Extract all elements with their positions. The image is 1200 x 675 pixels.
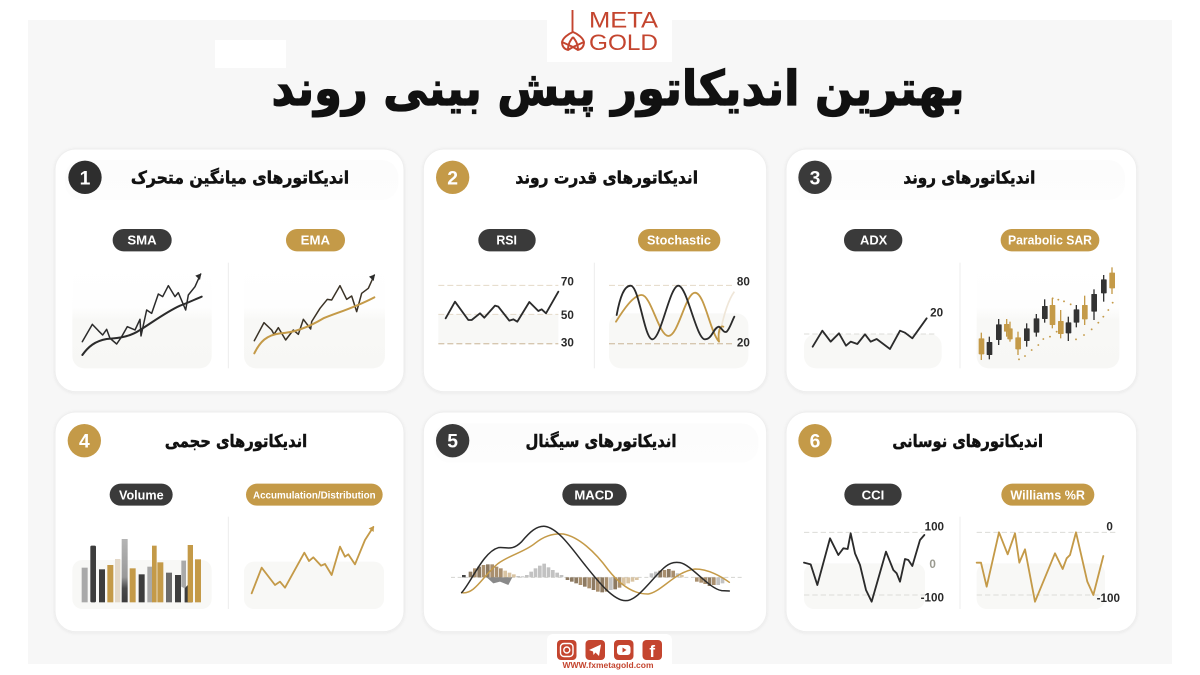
Stochastic pill <box>638 229 720 251</box>
logo wordmark <box>589 8 658 55</box>
number badge 5: 5 <box>447 432 458 453</box>
panel 2: trend strength indicators <box>423 149 767 392</box>
MACD histogram <box>462 564 724 592</box>
main title: بهترین اندیکاتور پیش بینی روند <box>272 61 964 117</box>
icon: facebook: f <box>649 642 655 661</box>
panel 3: trend indicators <box>786 149 1137 392</box>
Williams %R pill: Williams %R <box>1010 488 1085 502</box>
panel 5: signal indicators <box>423 412 767 632</box>
panel heading: اندیکاتورهای نوسانی <box>892 432 1043 452</box>
Volume bar chart <box>72 539 212 609</box>
Williams %R chart: 0 <box>1106 521 1113 534</box>
RSI chart: 70 <box>561 276 574 289</box>
logo wordmark: GOLD <box>589 30 658 55</box>
EMA pill: EMA <box>301 234 330 248</box>
Parabolic SAR pill: Parabolic SAR <box>1008 234 1092 248</box>
RSI pill: RSI <box>496 234 517 248</box>
CCI chart: 100 <box>925 521 944 534</box>
Stochastic chart: 80 <box>737 276 750 289</box>
number badge 4 <box>68 424 101 457</box>
ADX pill: ADX <box>860 234 888 248</box>
Stochastic chart <box>609 276 750 368</box>
RSI pill <box>478 229 536 251</box>
website address: WWW.fxmetagold.com <box>562 661 654 670</box>
EMA chart <box>244 263 385 368</box>
CCI chart <box>804 521 944 609</box>
MACD pill <box>562 484 627 506</box>
icon: instagram <box>557 640 576 660</box>
MACD line <box>462 526 729 601</box>
SMA pill: SMA <box>127 234 157 248</box>
small white patch <box>215 40 286 68</box>
panel heading: اندیکاتورهای میانگین متحرک <box>131 168 349 189</box>
MACD chart <box>451 526 742 601</box>
number badge 3 <box>798 161 832 194</box>
panel 4: volume indicators <box>55 412 404 632</box>
Volume pill <box>110 484 173 506</box>
RSI chart: 50 <box>561 309 574 322</box>
header band <box>797 160 1125 200</box>
Parabolic SAR pill <box>1001 229 1099 251</box>
Stochastic chart: 20 <box>737 337 750 350</box>
SMA pill <box>113 229 172 251</box>
number badge 5 <box>436 424 469 457</box>
RSI chart <box>438 276 574 350</box>
panel 1: moving average indicators <box>55 149 404 392</box>
panel heading: اندیکاتورهای روند <box>903 169 1035 189</box>
number badge 2: 2 <box>447 168 458 189</box>
logo: Meta Gold <box>547 0 672 62</box>
icon: youtube <box>614 640 634 660</box>
Stochastic pill: Stochastic <box>647 234 711 248</box>
panel heading: اندیکاتورهای قدرت روند <box>515 169 698 189</box>
header band <box>65 160 398 200</box>
MACD pill: MACD <box>574 488 614 502</box>
number badge 2 <box>436 161 469 194</box>
CCI chart: 0 <box>929 558 936 571</box>
number badge 1: 1 <box>80 168 91 189</box>
number badge 4: 4 <box>79 432 90 453</box>
EMA pill <box>286 229 345 251</box>
number badge 3: 3 <box>810 168 821 189</box>
Parabolic SAR candlestick chart <box>977 263 1119 368</box>
signal line <box>462 534 729 594</box>
Williams %R chart <box>977 521 1120 609</box>
CCI pill: CCI <box>862 488 884 502</box>
Accumulation/Distribution pill: Accumulation/Distribution <box>253 491 376 502</box>
panel heading: اندیکاتورهای حجمی <box>165 432 307 452</box>
panel 6: oscillator indicators <box>786 412 1137 632</box>
logo icon: tulip <box>562 10 584 50</box>
header band <box>433 423 758 463</box>
Accumulation/Distribution pill <box>246 484 383 506</box>
Volume pill: Volume <box>119 488 164 502</box>
CCI chart: -100 <box>921 591 944 604</box>
number badge 6 <box>798 424 832 457</box>
number badge 6: 6 <box>810 432 821 453</box>
Williams %R chart: -100 <box>1097 592 1120 605</box>
ADX chart <box>804 307 943 368</box>
logo wordmark: META <box>589 8 658 32</box>
RSI chart: 30 <box>561 337 574 350</box>
SMA chart <box>72 263 212 368</box>
CCI pill <box>844 484 902 506</box>
Accumulation/Distribution chart <box>244 526 384 609</box>
ADX chart: 20 <box>930 307 943 320</box>
icon: telegram <box>586 640 605 660</box>
ADX pill <box>844 229 902 251</box>
number badge 1 <box>68 161 102 194</box>
footer: social icons and website <box>547 634 672 675</box>
Williams %R pill <box>1001 484 1094 506</box>
panel heading: اندیکاتورهای سیگنال <box>525 431 676 452</box>
